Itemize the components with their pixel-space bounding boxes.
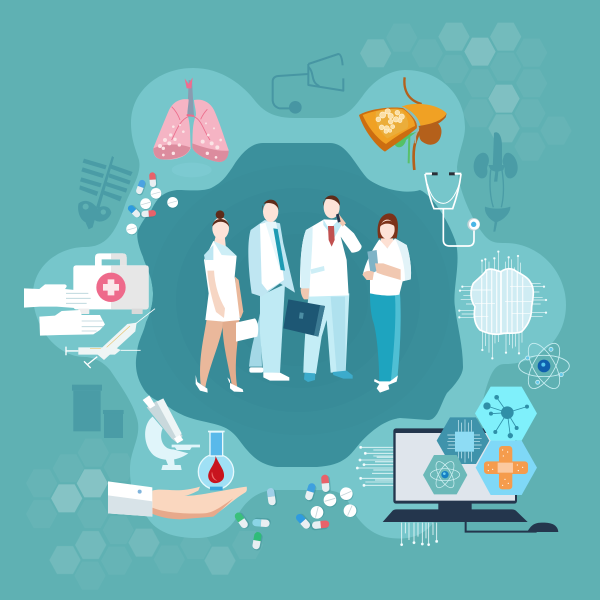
hexagon: plaster cross bbox=[476, 441, 537, 495]
icon: liver bbox=[359, 77, 447, 170]
pills: upper left bbox=[126, 172, 179, 235]
icon: flask with blood drop bbox=[198, 431, 234, 490]
icon: first aid kit bbox=[73, 253, 149, 314]
figure: doctor on phone bbox=[300, 195, 362, 382]
dark center blob with rings bbox=[136, 143, 463, 467]
icon: hand with lab coat sleeve bbox=[108, 481, 247, 519]
figure: briefcase bbox=[283, 299, 325, 337]
icon: syringes bbox=[66, 309, 155, 368]
icon: stethoscope white bbox=[425, 172, 480, 246]
icon: weights silhouette bbox=[72, 385, 124, 438]
hexagon: network bbox=[475, 387, 537, 441]
figure: nurse's white bag bbox=[236, 318, 258, 342]
circuit lines left of monitor bbox=[356, 446, 393, 486]
icon: atom bbox=[519, 339, 569, 393]
hexagon: microchip bbox=[437, 417, 489, 464]
figure: doctor in open coat bbox=[248, 200, 295, 381]
medical team bbox=[196, 195, 411, 393]
circuit lines below base bbox=[401, 523, 438, 546]
figure: woman with folder bbox=[363, 213, 411, 393]
icon: stethoscope silhouette bbox=[273, 54, 343, 114]
icon: computer with hexagons bbox=[356, 387, 558, 546]
icon: lungs bbox=[153, 77, 229, 177]
icon: kidneys silhouette bbox=[474, 132, 518, 232]
figure: nurse bbox=[196, 210, 243, 393]
monitor bbox=[383, 428, 528, 522]
icon: ribcage x-ray silhouette bbox=[78, 156, 133, 229]
hexagon pattern: bottom left bbox=[26, 439, 263, 590]
icon: digital brain bbox=[458, 251, 547, 359]
hexagon pattern: top right bbox=[360, 23, 572, 161]
light blob backdrop bbox=[33, 68, 566, 539]
mouse and cable bbox=[466, 522, 558, 532]
icon: microscope bbox=[143, 395, 200, 470]
brain circuit lines bbox=[458, 251, 547, 359]
icon: gloved hands bbox=[24, 284, 105, 336]
pills: bottom bbox=[233, 474, 360, 551]
hexagon: atom bbox=[423, 455, 467, 494]
